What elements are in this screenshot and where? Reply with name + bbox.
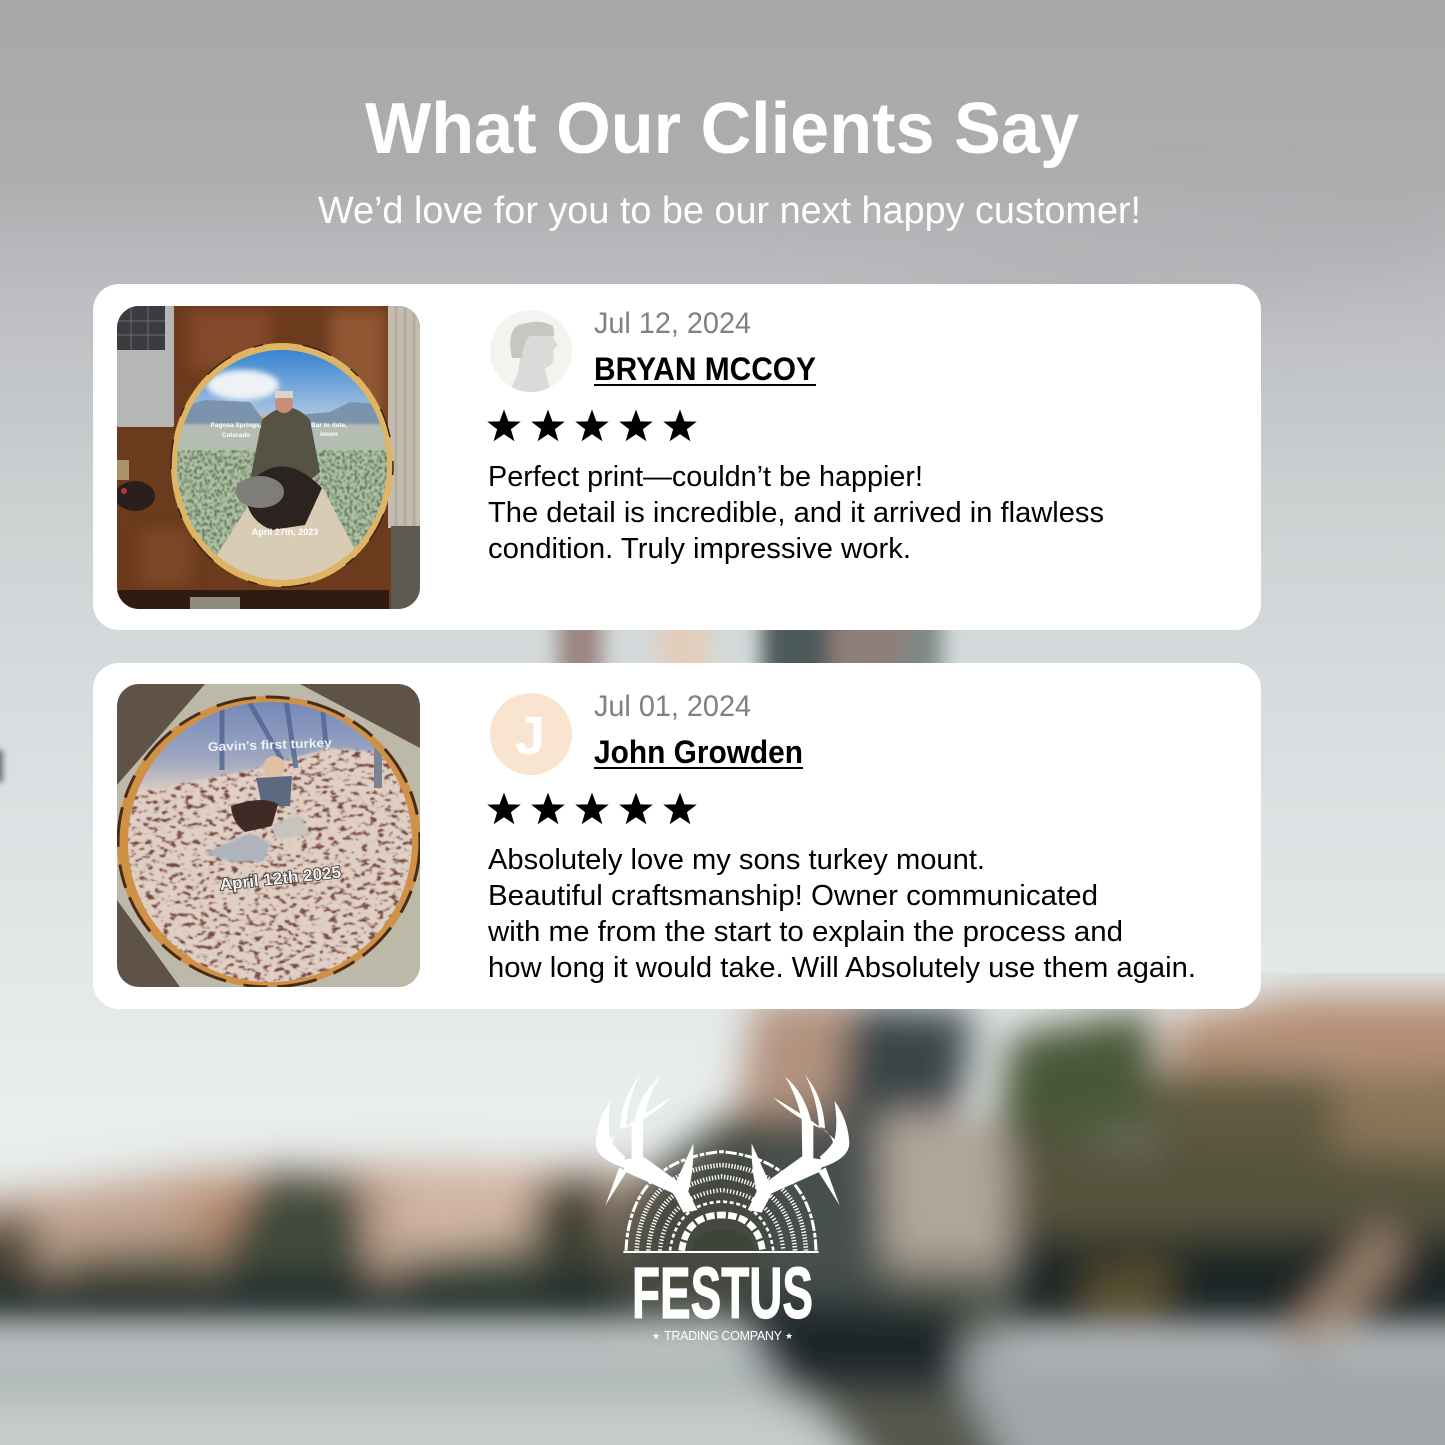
reviewer name: BRYAN MCCOY bbox=[594, 351, 816, 387]
reviewer name: John Growden bbox=[594, 734, 803, 770]
review text: The detail is incredible, and it arrived in flawless bbox=[488, 497, 1104, 529]
review text: Perfect print—couldn’t be happier! bbox=[488, 461, 923, 493]
five-star rating bbox=[487, 792, 697, 824]
photo: boy with turkey print on wood slice bbox=[117, 684, 421, 990]
reviewer avatar: initial J bbox=[490, 693, 572, 775]
photo caption text: April 27th, 2023 bbox=[252, 527, 318, 537]
photo caption text: Pagosa Springs, bbox=[211, 422, 262, 429]
review text: condition. Truly impressive work. bbox=[488, 533, 911, 565]
photo caption text: Colorado bbox=[222, 432, 250, 439]
panel: review by Bryan McCoy bbox=[93, 284, 1261, 630]
logo tagline: ★ bbox=[785, 1331, 793, 1341]
review text bbox=[488, 461, 1104, 565]
review text: Absolutely love my sons turkey mount. bbox=[488, 844, 985, 876]
wood slice rim bbox=[117, 696, 421, 988]
logo tagline: TRADING COMPANY bbox=[664, 1329, 783, 1343]
photo: turkey print on wood slice on desk bbox=[115, 306, 420, 609]
logo tagline: ★ bbox=[652, 1331, 660, 1341]
wood slice rim bbox=[171, 343, 393, 587]
review text: with me from the start to explain the process and bbox=[487, 916, 1123, 948]
logo: Festus Trading Company bbox=[596, 1075, 849, 1343]
title: What Our Clients Say bbox=[365, 89, 1079, 169]
reviewer avatar: silhouette bbox=[490, 310, 572, 392]
logo wordmark: FESTUS bbox=[632, 1254, 813, 1334]
photo caption text: Bar to date, bbox=[311, 422, 347, 429]
photo caption date: April 12th 2025 bbox=[219, 863, 342, 894]
printed scene bbox=[128, 702, 412, 982]
panel: review by John Growden bbox=[93, 663, 1261, 1009]
review text: how long it would take. Will Absolutely use them again. bbox=[488, 952, 1196, 984]
review date: Jul 01, 2024 bbox=[594, 690, 751, 723]
photo caption text: Gavin's first turkey bbox=[208, 736, 332, 754]
review date: Jul 12, 2024 bbox=[594, 307, 751, 340]
logo mark: antlers over turkey fan bbox=[596, 1075, 849, 1253]
review text bbox=[487, 844, 1196, 984]
printed scene bbox=[177, 350, 387, 580]
subtitle: We’d love for you to be our next happy customer! bbox=[318, 190, 1141, 232]
review text: Beautiful craftsmanship! Owner communicated bbox=[488, 880, 1098, 912]
reviewer avatar: initial J: J bbox=[515, 706, 545, 766]
photo caption text: boom bbox=[320, 431, 338, 438]
five-star rating bbox=[487, 410, 697, 441]
photo caption text bbox=[211, 422, 347, 537]
